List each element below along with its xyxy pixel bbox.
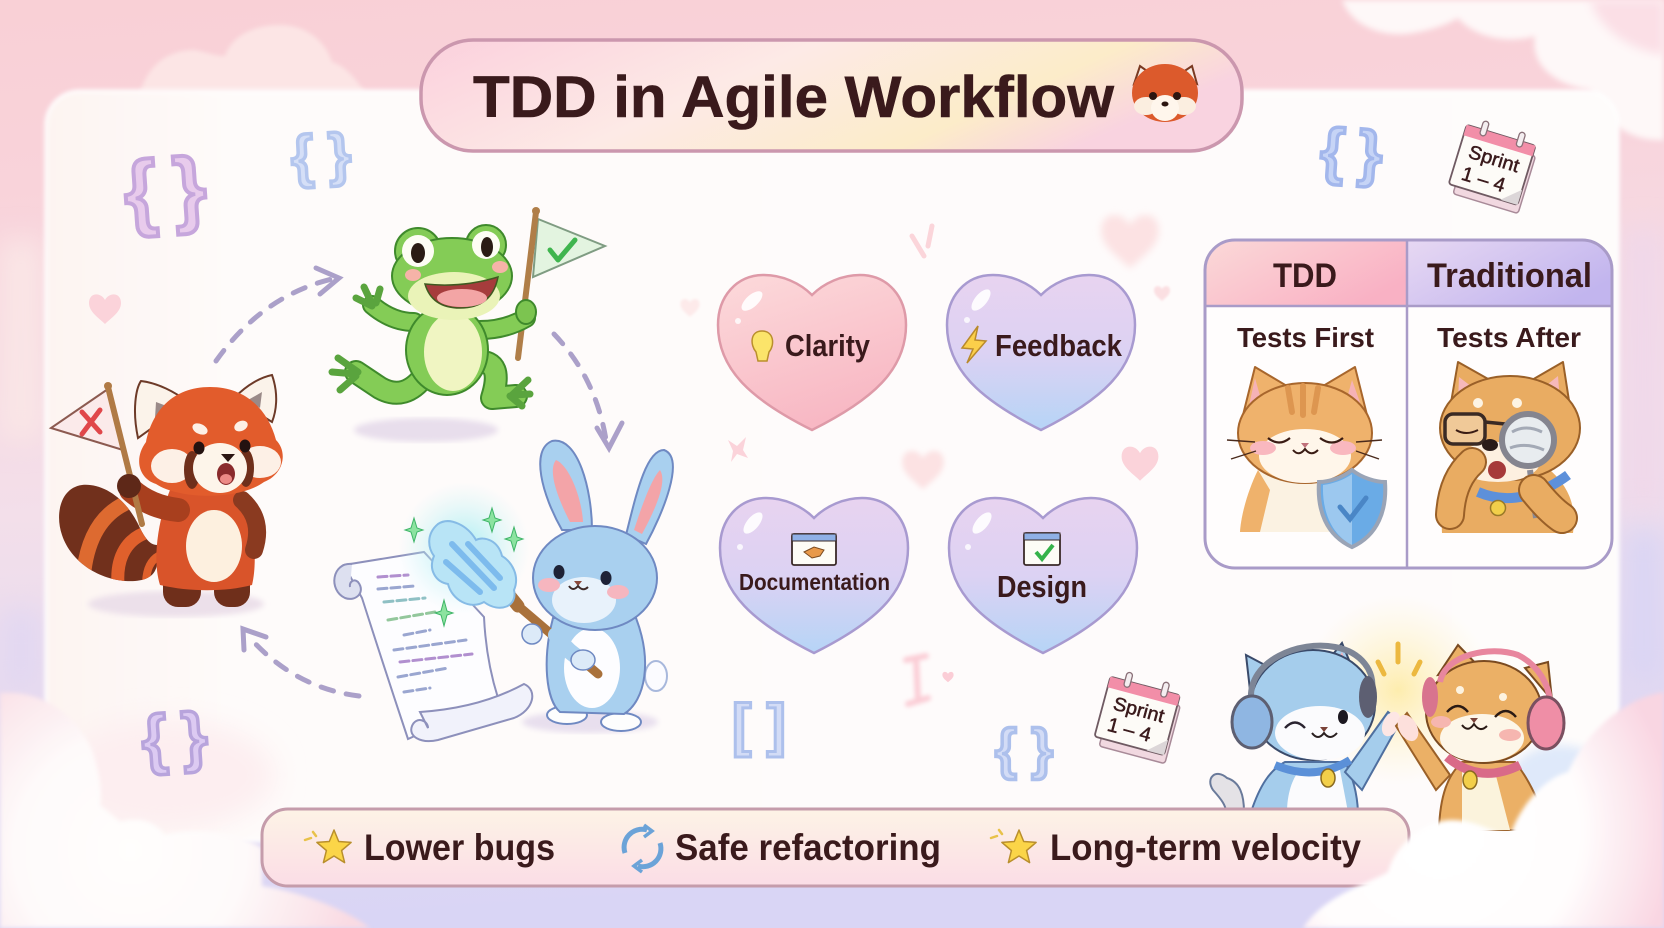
sprint calendar bottom [1092,668,1185,764]
icon: red panda face [1132,64,1198,122]
TDD header: TDD [1273,257,1337,295]
high five spark rays [1378,644,1420,674]
star sparkle [991,830,1002,838]
Lower bugs: Lower bugs [364,827,555,868]
back cloud top left [140,25,365,92]
code brace decorations: [ ] [732,693,786,758]
sleeping tabby cat with shield [1227,367,1385,547]
headphones [1440,651,1550,705]
Tests After: Tests After [1437,322,1581,353]
head [395,228,441,274]
belly [186,510,242,582]
blue cat with headphones [1210,643,1404,812]
heart: Documentation [720,498,908,653]
legs [163,565,201,607]
bottom right cloud [1303,692,1664,928]
main panel [46,91,1618,841]
arrow: frog to bunny [554,334,622,448]
glow [398,482,530,614]
head [533,526,657,630]
code brace decorations: { } [1318,116,1385,189]
heart: Design [949,498,1137,653]
title banner [421,40,1242,151]
panel pink blush [55,720,275,830]
high five glow [1303,595,1493,785]
mouth [425,277,498,308]
duster [429,521,598,674]
right side blue glow [1505,745,1615,835]
icon: star [317,830,351,863]
heart: Clarity [718,275,906,430]
heart: Design: Design [997,569,1087,604]
arrow: panda to frog [216,268,339,361]
heart: Documentation: Documentation [739,569,890,595]
code brace decorations: { } [289,122,353,190]
ears [540,441,592,530]
code brace decorations: { } [121,139,209,239]
bottom left cloud [0,693,370,928]
sprint calendar bottom: Sprint [1111,694,1167,728]
sprint calendar top right: 1 – 4 [1459,163,1508,197]
benefits bar [262,809,1409,886]
heart: Feedback [947,275,1135,430]
heart: Feedback: Feedback [995,328,1123,363]
flag [518,207,605,358]
legs and arms [332,287,530,406]
sprint calendar bottom: 1 – 4 [1105,714,1154,747]
code brace decorations: { } [139,698,210,776]
top right cloud [1342,0,1664,140]
Safe refactoring: Safe refactoring [675,827,941,868]
icon: shield [1319,470,1385,547]
shiba dog with magnifier [1440,362,1580,533]
icon: star [1002,830,1036,863]
cycle: red panda with red flag [50,375,283,617]
headphones [1251,646,1372,700]
ears [135,381,188,438]
icon: app window with check [1024,533,1060,565]
paws [1450,462,1472,515]
code scroll [334,552,532,741]
orange cat with headphones [1393,645,1564,830]
paws [556,635,582,660]
comparison table [1205,240,1612,568]
sprint calendar top right [1446,116,1541,214]
icon: refresh arrows [624,825,661,872]
Traditional header: Traditional [1427,257,1592,295]
cycle: blue bunny with feather duster [398,441,673,733]
heart: Clarity: Clarity [785,328,871,363]
sprint calendar top right: Sprint [1466,142,1522,177]
head [139,387,283,496]
icon: app window with wrench [792,534,836,565]
cycle: green frog with check flag [332,207,605,442]
feet [547,706,587,724]
icon: lightning bolt [962,326,986,363]
title text: TDD in Agile Workflow [473,65,1115,130]
body [547,618,645,714]
icon: light bulb [752,331,773,361]
top right cloud blush [1590,0,1664,55]
arrow: bunny back to panda [243,629,359,696]
magnifier [1530,470,1536,518]
star sparkle [305,832,316,840]
Long-term velocity: Long-term velocity [1050,827,1361,868]
code brace decorations: { } [995,717,1053,780]
Tests First: Tests First [1237,322,1374,353]
background tints [0,230,1664,690]
background pink hearts and marks [89,215,1170,704]
tail [59,484,157,582]
table headers [1205,240,1612,306]
code brace decorations [121,116,1385,780]
arms [242,500,257,550]
flag [51,382,142,524]
torso [156,490,255,590]
body [406,305,488,395]
sparkles [405,508,523,626]
